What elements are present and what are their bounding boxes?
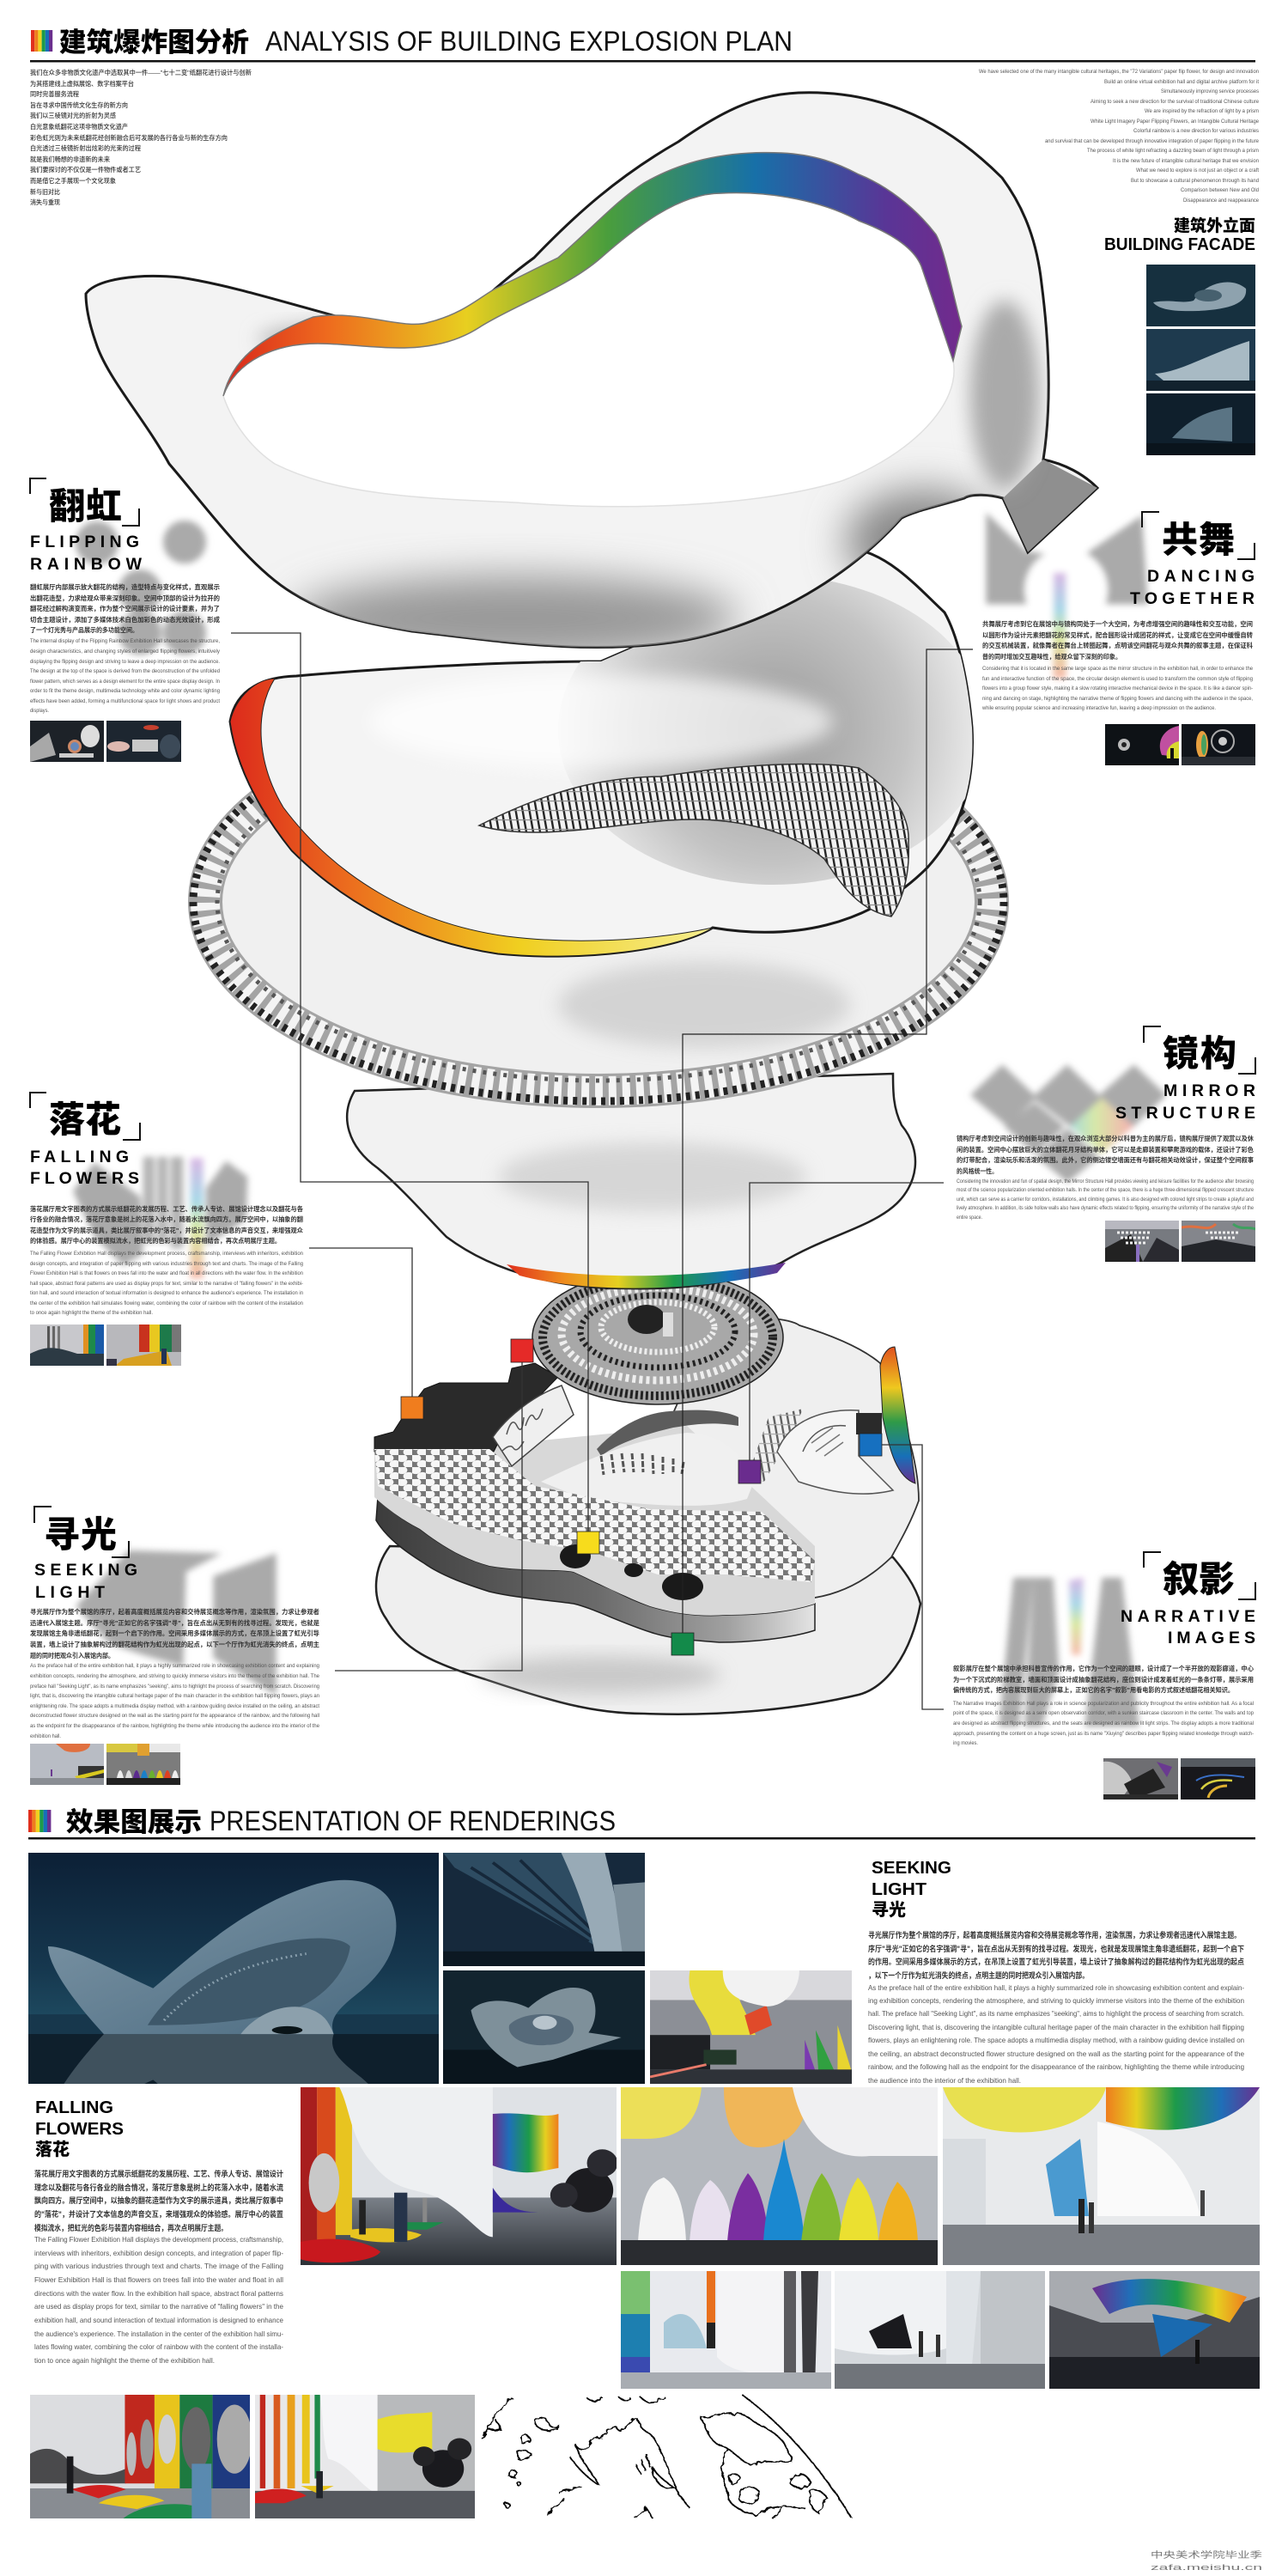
blurred emblem: mirror structure <box>970 1064 1166 1183</box>
English description: entire space. <box>957 1215 982 1221</box>
image: dark hall with rainbow ceiling <box>1049 2271 1260 2389</box>
Chinese description: 普的同时增加交互趣味性，给观众留下深刻的印象。 <box>982 653 1121 661</box>
Chinese description <box>953 1665 1255 1694</box>
panel: seeking light <box>30 1507 320 1785</box>
English description: ning and dancing on stage, highlighting the narrative theme of flipping flowers and dancing with the audience in the space, <box>982 696 1253 702</box>
thumbnail 1 <box>1105 724 1179 765</box>
English description: displays. <box>30 708 49 714</box>
heading: IMAGES <box>1168 1629 1255 1647</box>
text block: Chinese introduction <box>30 69 252 206</box>
heading: 寻光 <box>44 1514 117 1555</box>
heading: 落花 <box>49 1099 121 1140</box>
thumbnail 2 <box>1182 1221 1255 1262</box>
English description: design concepts, and integration of paper flipping with various industries through text and charts. The image of the Falling <box>30 1261 303 1267</box>
text block: English introduction: Simultaneously improving service processes <box>1161 88 1259 94</box>
English description: ping with various industries through text and charts. The image of the Falling <box>34 2262 283 2270</box>
blurred emblem: dancing together <box>986 513 1148 679</box>
image: facade night view <box>1146 265 1255 326</box>
heading: FLOWERS <box>35 2120 124 2139</box>
connector: narrative images to blue marker <box>882 1445 944 1709</box>
English description: Considering that it is located in the same large space as the mirror structure in the exhibition hall, in order to enhance the <box>982 666 1253 672</box>
English description: The design at the top of the space is derived from the deconstruction of the unfolded <box>30 668 220 674</box>
Chinese description <box>30 1205 304 1245</box>
English description <box>981 666 1253 711</box>
lattice ring: rib band <box>193 703 1004 1101</box>
English description: point of the space, it is designed as a semi open observation corridor, with a sunken staircase classroom in the center. The walls and top <box>953 1710 1254 1716</box>
English description: are designed as abstract flipping structures, and the seats are designed as rainbow lit light strips. The display adopts a more traditional <box>953 1720 1254 1726</box>
text block: English introduction: The process of white light refracting a dazzling beam of light through a prism <box>1087 148 1259 154</box>
panel: falling flowers rendering text <box>34 2098 283 2365</box>
heading: presentation of renderings: PRESENTATION OF RENDERINGS <box>210 1806 616 1836</box>
English description: interviews with inheritors, exhibition design concepts, and integration of paper flip- <box>34 2249 283 2257</box>
English description: rainbow, and the following hall as the endpoint for the disappearance of the rainbow, highlighting the theme while introducing <box>868 2062 1244 2071</box>
Chinese description: 发现展馆主角非遗纸翻花，起到一个启下的作用。空间采用多媒体展示的方式，在吊顶上设置了虹光引导 <box>30 1629 319 1637</box>
level: plate floor <box>374 1426 815 1616</box>
English description: As the preface hall of the entire exhibition hall, it plays a highly summarized role in showcasing exhibition content and explain- <box>868 1983 1244 1992</box>
English description: as the endpoint for the disappearance of the rainbow, highlighting the theme while introducing the audience into the interior of the <box>30 1723 319 1729</box>
heading: FALLING <box>35 2098 113 2117</box>
wall: gray curved inner wall <box>597 1410 738 1456</box>
bowl rainbow band <box>230 679 713 956</box>
heading <box>35 2098 124 2159</box>
Chinese description: 的灯带配合，渲染玩乐和活泼的氛围。此外，它的侧边镂空墙面还有与翻花相关动效设计，保证整个空间叙事 <box>957 1156 1255 1164</box>
heading: 落花 <box>35 2140 70 2159</box>
icon: rainbow title mark <box>31 30 52 52</box>
heading: RAINBOW <box>30 555 143 574</box>
English description <box>957 1178 1254 1221</box>
English description: the audience into the interior of the exhibition hall. <box>868 2076 1021 2085</box>
marker: green <box>671 1633 694 1655</box>
roof rainbow band <box>223 153 962 396</box>
brackets <box>34 1507 129 1557</box>
panel: mirror structure <box>957 1026 1255 1262</box>
Chinese description: 翻虹展厅内部展示放大翻花的结构，造型特点与变化样式，直观展示 <box>30 583 221 591</box>
English description: The internal display of the Flipping Rainbow Exhibition Hall showcases the structure, <box>30 638 220 644</box>
bowl lattice crescent <box>479 764 908 917</box>
level: plate wall band <box>376 1497 815 1642</box>
Chinese description: 共舞展厅考虑到它在展馆中与镜构同处于一个大空间，为考虑增强空间的趣味性和交互功能，空间 <box>982 620 1253 628</box>
English description <box>30 1251 303 1316</box>
Chinese description <box>30 1608 320 1659</box>
English description <box>30 1663 319 1739</box>
wall: white curved panel <box>493 1385 574 1466</box>
English description: the ceiling, an abstract deconstructed flower structure designed on the wall as the starting point for the appearance of the <box>868 2049 1244 2058</box>
English description: effects have been added, forming a multifunctional space for light shows and product <box>30 698 220 704</box>
watermark: source site: zafa.meishu.cn <box>1151 2563 1262 2572</box>
brackets <box>1142 512 1255 559</box>
Chinese description: 行各业的融合情况，落花厅意象是树上的花落入水中，随着水流飘向四方。展厅空间中，以抽象的翻 <box>30 1215 304 1223</box>
Chinese description: 镜构厅考虑到空间设计的创新与趣味性，在观众浏览大部分以科普为主的展厅后，镜构展厅提供了观赏以及休 <box>957 1135 1255 1142</box>
level: big bowl <box>230 550 987 956</box>
English description: lates flowing water, combining the color of rainbow with the content of the installa- <box>34 2342 283 2351</box>
marker: purple <box>738 1460 761 1483</box>
text block: Chinese introduction: 我们以三棱镜对光的折射为灵感 <box>30 112 117 119</box>
text block: Chinese introduction: 白光透过三棱镜折射出炫彩的光束的过程 <box>30 144 142 152</box>
blurred emblem: flipping rainbow circles <box>76 521 206 655</box>
ring interior <box>221 726 976 1078</box>
text block: English introduction: Comparison between New and Old <box>1181 187 1259 193</box>
Chinese description: 的体验感。展厅中心的装置模拟流水，把虹光的色彩与装置内容相结合，再次点明展厅主题。 <box>30 1237 281 1245</box>
marker: yellow <box>577 1532 599 1554</box>
image: interior colored blades <box>650 1970 852 2084</box>
text block: English introduction: and survival that can be developed through innovative integration of paper flipping in the future <box>1045 138 1259 144</box>
panel: flipping rainbow <box>30 478 221 762</box>
heading: MIRROR <box>1163 1081 1255 1100</box>
Chinese description: 题的同时把观众引入展馆内部。 <box>30 1652 114 1659</box>
heading <box>1121 1559 1255 1647</box>
heading: 翻虹 <box>49 486 122 527</box>
English description: exhibition hall. <box>30 1733 61 1739</box>
dome: lattice <box>532 1270 783 1404</box>
text block: Chinese introduction: 白光意象纸翻花这项非物质文化遗产 <box>30 123 128 131</box>
heading <box>1130 520 1255 608</box>
connector: dancing together to green marker <box>683 649 973 1633</box>
Chinese description <box>34 2169 283 2232</box>
connector: flipping rainbow to yellow marker <box>231 633 588 1532</box>
Chinese description: 飘向四方。展厅空间中，以抽象的翻花造型作为文字的展示道具，类比展厅叙事中 <box>34 2195 283 2205</box>
text block: Chinese introduction: 彩色虹光则为未来纸翻花经创新融合后可发展的各行各业与新的生存方向 <box>30 134 228 142</box>
level: dark rear wall <box>374 1363 558 1452</box>
thumbnail 2 <box>106 721 181 762</box>
text block: Chinese introduction: 为其搭建线上虚拟展馆、数字档案平台 <box>30 80 134 88</box>
text block: Chinese introduction: 就是我们畅想的非遗新的未来 <box>30 155 111 163</box>
amphitheater: right <box>777 1410 893 1494</box>
exploded axonometric building illustration <box>86 93 1097 1714</box>
brackets <box>30 478 139 526</box>
title: analysis of building explosion plan <box>59 26 793 58</box>
level: white right lobes plate <box>653 1318 919 1598</box>
thumbnail 1 <box>30 1325 104 1366</box>
thumbnail 1 <box>1103 1758 1178 1800</box>
text block: English introduction: Disappearance and reappearance <box>1183 198 1259 204</box>
English description: tion to once again highlight the theme of the exhibition hall. <box>34 2356 215 2365</box>
English description: The Narrative Images Exhibition Hall plays a role in science popularization and publicity throughout the entire exhibition hall. As a focal <box>953 1701 1254 1707</box>
marker: orange <box>401 1397 423 1419</box>
heading <box>1115 1033 1255 1123</box>
English description: displaying the flipping design and striving to leave a deep impression on the audience. <box>30 659 220 665</box>
image: facade dusk view <box>1146 329 1255 391</box>
heading: building facade: BUILDING FACADE <box>1104 235 1255 254</box>
heading: LIGHT <box>872 1880 927 1899</box>
English description: flowers into a group flower style, making it a slow rotating interactive mechanical device in the space. It is like a dancer spin- <box>982 685 1253 691</box>
English description: The Falling Flower Exhibition Hall displays the development process, craftsmanship, <box>34 2235 283 2244</box>
heading: 共舞 <box>1162 520 1235 560</box>
icon: rainbow section mark <box>28 1810 51 1832</box>
Chinese description: 模拟流水，把虹光的色彩与装置内容相结合，再次点明展厅主题。 <box>34 2223 228 2232</box>
English description: approach, presenting the content on a huge screen, just as its name "Xiuying" describes paper flipping related knowledge through watch- <box>953 1731 1254 1737</box>
Chinese description: 花造型作为文字的展示道具，类比展厅叙事中的"落花"，并设计了文本信息的声音交互，来增强观众 <box>30 1227 304 1234</box>
Chinese description <box>957 1135 1255 1175</box>
image: aerial night view <box>443 1970 645 2084</box>
English description: fun and interactive function of the space, the circular design element is used to transform the common style of flipping <box>982 676 1253 682</box>
Chinese description <box>982 620 1254 661</box>
text block: English introduction: We are inspired by the refraction of light by a prism <box>1145 108 1259 114</box>
image: night fan wall <box>443 1853 645 1966</box>
heading: STRUCTURE <box>1115 1104 1255 1123</box>
English description: hall. The preface hall "Seeking Light", as its name emphasizes "seeking", aims to highlight the process of searching from scratch. <box>868 2009 1244 2018</box>
level: flower plate <box>347 1074 915 1288</box>
text block: English introduction: What we need to explore is not just an object or a craft <box>1136 167 1259 174</box>
Chinese description: 以圆形作为设计元素把翻花的常见样式，配合圆形设计成团花的样式，让变成它在空间中缓慢自转 <box>982 631 1254 639</box>
English description: the audience's experience. The installation in the center of the exhibition hall simu- <box>34 2329 283 2338</box>
English description: light, that is, discovering the intangible cultural heritage paper of the main character in the exhibition hall flipping flowers, plays an <box>30 1693 319 1699</box>
English description: Flower Exhibition Hall is that flowers on trees fall into the water and float in all <box>34 2275 283 2284</box>
image: night exterior hero <box>28 1853 439 2084</box>
watermark: source site: 中央美术学院毕业季 <box>1151 2549 1262 2561</box>
text block: English introduction: It is the new future of intangible cultural heritage that we envision <box>1113 158 1259 164</box>
English description: Flower Exhibition Hall is that flowers on trees fall into the water and float in all directions with the water flow. In the exhibition <box>30 1270 303 1276</box>
text block: English introduction: But to showcase a cultural phenomenon through its hand <box>1131 178 1259 184</box>
heading <box>34 1514 137 1602</box>
thumbnail 1 <box>30 721 104 762</box>
English description: directions with the water flow. In the exhibition hall space, abstract floral patterns <box>34 2289 283 2298</box>
text block: Chinese introduction: 我们在众多非物质文化遗产中选取其中一件——"七十二变"纸翻花进行设计与创新 <box>30 69 252 76</box>
English description <box>34 2235 283 2365</box>
image: rainbow wall corridor <box>621 2271 831 2389</box>
Chinese description: 偏传统的方式，把内容展现到巨大的屏幕上，正如它的名字"叙影"用看电影的方式叙述纸翻花相关知识。 <box>953 1686 1234 1694</box>
English description: while ensuring popular science and increasing interactive fun, leaving a deep impression on the audience. <box>981 705 1216 711</box>
English description: to once again highlight the theme of the exhibition hall. <box>30 1310 153 1316</box>
heading: 寻光 <box>872 1900 906 1920</box>
text block: English introduction: Aiming to seek a new direction for the survival of traditional Chinese culture <box>1091 99 1259 105</box>
Chinese description: 序厅"寻光"正如它的名字强调"寻"，旨在点出从无到有的找寻过程。发现光，也就是发现展馆主角非遗纸翻花，起到一个启下 <box>868 1944 1244 1953</box>
connector: falling flowers to orange marker <box>309 1248 412 1397</box>
brackets <box>1144 1026 1255 1074</box>
heading: FLIPPING <box>30 533 139 551</box>
Chinese description: 的"落花"，并设计了文本信息的声音交互，来增强观众的体验感。展厅中心的装置 <box>34 2209 283 2219</box>
plate shading <box>498 1142 807 1211</box>
English description <box>868 1983 1244 2085</box>
level: roof ribbon <box>86 93 1097 661</box>
thumbnail 2 <box>1181 1758 1255 1800</box>
image: falling flowers hall with colored pillars <box>301 2087 617 2265</box>
English description: flowers, plays an enlightening role. The space adopts a multimedia display method, with a rainbow guiding device installed on <box>868 2036 1244 2044</box>
English description: deconstructed flower structure designed on the wall as the starting point for the appearance of the rainbow, and the following hall <box>30 1713 319 1719</box>
stair lattice <box>747 1409 803 1482</box>
Chinese description: 出翻花造型，力求给观众带来深刻印象。空间中顶部的设计为拉开的 <box>30 594 220 602</box>
Chinese description: 落花展厅用文字图表的方式展示纸翻花的发展历程、工艺、传承人专访、展馆设计理念以及翻花与各 <box>30 1205 304 1213</box>
Chinese description: 的交互机械装置，就像舞者在舞台上转圈起舞，点明该空间翻花与观众共舞的叙事主题，在保证科 <box>982 642 1254 649</box>
thumbnail 1 <box>30 1744 104 1785</box>
blurred emblem: narrative images <box>999 1578 1139 1726</box>
connector: mirror structure to purple marker <box>750 1183 944 1460</box>
image: colored drapes hall <box>255 2395 475 2518</box>
English description: are used as display props for text, similar to the narrative of "falling flowers" in the <box>34 2302 283 2311</box>
text block: Chinese introduction: 而是借它之手展现一个文化现象 <box>30 177 117 185</box>
panel: narrative images <box>953 1552 1255 1800</box>
heading <box>30 1099 139 1188</box>
English description: preface hall "Seeking Light", as its name emphasizes "seeking", aims to highlight the process of searching from scratch. Discovering <box>30 1684 319 1690</box>
Chinese description: 理念以及翻花与各行各业的融合情况，落花厅意象是树上的花落入水中，随着水流 <box>34 2183 283 2192</box>
English description: enlightening role. The space adopts a multimedia display method, with a rainbow guiding device installed on the ceiling, an abstract <box>30 1703 319 1709</box>
title: analysis of building explosion plan: 建筑爆炸图分析 <box>59 27 249 58</box>
heading: LIGHT <box>35 1583 105 1602</box>
rainbow blade <box>880 1347 915 1483</box>
English description: ing exhibition concepts, rendering the atmosphere, and striving to quickly immerse visitors into the theme of the exhibition <box>868 1996 1244 2005</box>
image: colorful pillars with oval panels <box>30 2395 250 2518</box>
panel: falling flowers <box>30 1093 304 1366</box>
panel: seeking light rendering text <box>868 1859 1244 2085</box>
heading: TOGETHER <box>1130 589 1255 608</box>
marker: blue <box>860 1434 882 1456</box>
English description: order to fit the theme design, multimedia technology white and color dynamic lighting <box>30 688 220 694</box>
Chinese description: 切合主题设计，添加了多媒体技术白色加彩色的动态光效设计，形成 <box>30 616 221 624</box>
brackets <box>1144 1552 1255 1599</box>
base: white ground slab <box>376 1546 920 1714</box>
English description: design characteristics, and changing styles of enlarged flipping flowers, intuitively <box>30 649 221 655</box>
blurred emblem: seeking light <box>76 1550 276 1695</box>
English description: As the preface hall of the entire exhibition hall, it plays a highly summarized role in showcasing exhibition content and explaining <box>30 1663 319 1669</box>
panel: dancing together <box>981 512 1255 765</box>
Chinese description: 的作用。空间采用多媒体展示的方式，在吊顶上设置了虹光引导装置，墙上设计了抽象解构过的翻花结构作为虹光出现的起点 <box>868 1957 1244 1966</box>
English description: flower pattern, which serves as a design element for the entire space display design. In <box>30 679 220 685</box>
floor: honeycomb lattice <box>374 1449 815 1582</box>
English description: Discovering light, that is, discovering the intangible cultural heritage paper of the main character in the exhibition hall flipping <box>868 2023 1244 2031</box>
Chinese description: 迅速代入展馆主题。序厅"寻光"正如它的名字强调"寻"，旨在点出从无到有的找寻过程。发现光，也就是 <box>30 1619 320 1627</box>
heading: presentation of renderings: 效果图展示 <box>66 1807 202 1837</box>
image: facade top view <box>1146 393 1255 455</box>
English description <box>30 638 221 714</box>
heading: FLOWERS <box>30 1169 139 1188</box>
Chinese description: 闲的装置。空间中心摆放巨大的立体翻花月牙结构单体，它可以是走廊装置和攀爬游戏的载体，还设计了彩色 <box>957 1146 1255 1154</box>
text block: English introduction: Build an online virtual exhibition hall and digital archive platform for it <box>1104 79 1259 85</box>
heading: building facade: 建筑外立面 <box>1174 216 1255 235</box>
Chinese description: 落花展厅用文字图表的方式展示纸翻花的发展历程、工艺、传承人专访、展馆设计 <box>34 2169 283 2178</box>
image: white fabric corridor <box>835 2271 1045 2389</box>
English description: exhibition concepts, rendering the atmosphere, and striving to quickly immerse visitors into the theme of the exhibition hall. The <box>30 1673 319 1679</box>
image: contour line drawing <box>482 2395 852 2518</box>
plate rainbow arc <box>507 1263 786 1288</box>
Chinese description: 寻光展厅作为整个展馆的序厅，起着高度概括展览内容和交待展览概念等作用，渲染氛围，力求让参观者 <box>30 1608 320 1616</box>
watermark: source site <box>1151 2549 1262 2572</box>
thumbnail 2 <box>106 1325 181 1366</box>
Chinese description: 了一个灯光秀与产品展示的多功能空间。 <box>30 626 138 634</box>
heading: DANCING <box>1147 567 1255 586</box>
heading: building facade <box>1104 216 1255 254</box>
Chinese description: 为一个下沉式的阶梯教室，墙面和顶面设计成抽象翻花结构，座位则设计成发着虹光的一条条灯带，展示采用 <box>953 1676 1254 1684</box>
Chinese description <box>868 1930 1244 1980</box>
English description <box>953 1701 1254 1746</box>
English description: ing movies. <box>953 1740 978 1746</box>
image: colored arches hall <box>621 2087 938 2265</box>
heading: NARRATIVE <box>1121 1607 1255 1626</box>
text block: Chinese introduction: 消失与重现 <box>30 198 61 206</box>
English description: hall space, abstract floral patterns are used as display props for text, similar to the narrative of "falling flowers" in the exhibi- <box>30 1281 303 1287</box>
heading: SEEKING <box>34 1561 137 1580</box>
Chinese description: ，以下一个厅作为虹光消失的终点，点明主题的同时把观众引入展馆内部。 <box>868 1970 1089 1980</box>
heading <box>30 486 143 574</box>
floor: central white area with petals <box>541 1433 756 1506</box>
text block: Chinese introduction: 我们要探讨的不仅仅是一件物件或者工艺 <box>30 166 141 174</box>
heading: FALLING <box>30 1148 129 1166</box>
brackets <box>30 1093 140 1140</box>
thumbnail 1 <box>1105 1221 1179 1262</box>
Chinese description: 翻花经过解构演变而来，作为整个空间展示设计的设计要素，并为了 <box>30 605 220 612</box>
roof opening <box>223 193 954 507</box>
Chinese description <box>30 583 221 634</box>
dark openings <box>560 1544 703 1600</box>
English description: the center of the exhibition hall simulates flowing water, combining the color of rainbow with the content of the installation <box>30 1300 303 1306</box>
Chinese description: 寻光展厅作为整个展馆的序厅，起着高度概括展览内容和交待展览概念等作用，渲染氛围，力求让参观者迅速代入展馆主题。 <box>868 1930 1241 1940</box>
title: analysis of building explosion plan: ANALYSIS OF BUILDING EXPLOSION PLAN <box>265 26 793 57</box>
text block: English introduction: White Light Imagery Paper Flipping Flowers, an Intangible Cultural Heritage <box>1091 119 1259 125</box>
English description: The Falling Flower Exhibition Hall displays the development process, craftsmanship, interviews with inheritors, exhibition <box>30 1251 303 1257</box>
text block: English introduction: We have selected one of the many intangible cultural heritages, the "72 Variations" paper flip flower, for design and innovation <box>979 69 1259 75</box>
text block: Chinese introduction: 同时完善服务流程 <box>30 90 80 98</box>
thumbnail 2 <box>1182 724 1255 765</box>
heading: 叙影 <box>1163 1559 1235 1599</box>
image: draped rainbow canopy hall <box>943 2087 1260 2265</box>
English description: exhibition hall, and sound interaction of textual information is designed to enhance <box>34 2316 283 2324</box>
marker: red <box>511 1339 533 1362</box>
thumbnail 2 <box>106 1744 180 1785</box>
Chinese description: 的风格统一性。 <box>957 1167 998 1175</box>
heading <box>872 1859 951 1920</box>
heading: 镜构 <box>1163 1033 1236 1074</box>
heading: presentation of renderings <box>66 1806 616 1837</box>
text block: Chinese introduction: 新与旧对比 <box>30 188 60 196</box>
blurred emblem: falling flowers <box>73 1157 247 1278</box>
base: soft shading <box>481 1656 721 1694</box>
text block: English introduction: Colorful rainbow is a new direction for various industries <box>1133 128 1259 134</box>
heading: SEEKING <box>872 1859 951 1878</box>
Chinese description: 叙影展厅在整个展馆中承担科普宣传的作用，它作为一个空间的题眼，设计成了一个半开放的观影廊道，中心 <box>953 1665 1255 1672</box>
text block: English introduction <box>979 69 1259 204</box>
English description: tion hall, and sound interaction of textual information is designed to enhance the audience's experience. The installation in <box>30 1290 303 1296</box>
connector: seeking light to red marker <box>335 1362 522 1671</box>
Chinese description: 装置，墙上设计了抽象解构过的翻花结构作为虹光出现的起点，以下一个厅作为虹光消失的终点，点明主 <box>30 1641 320 1648</box>
text block: Chinese introduction: 旨在寻求中国传统文化生存的新方向 <box>30 101 128 109</box>
